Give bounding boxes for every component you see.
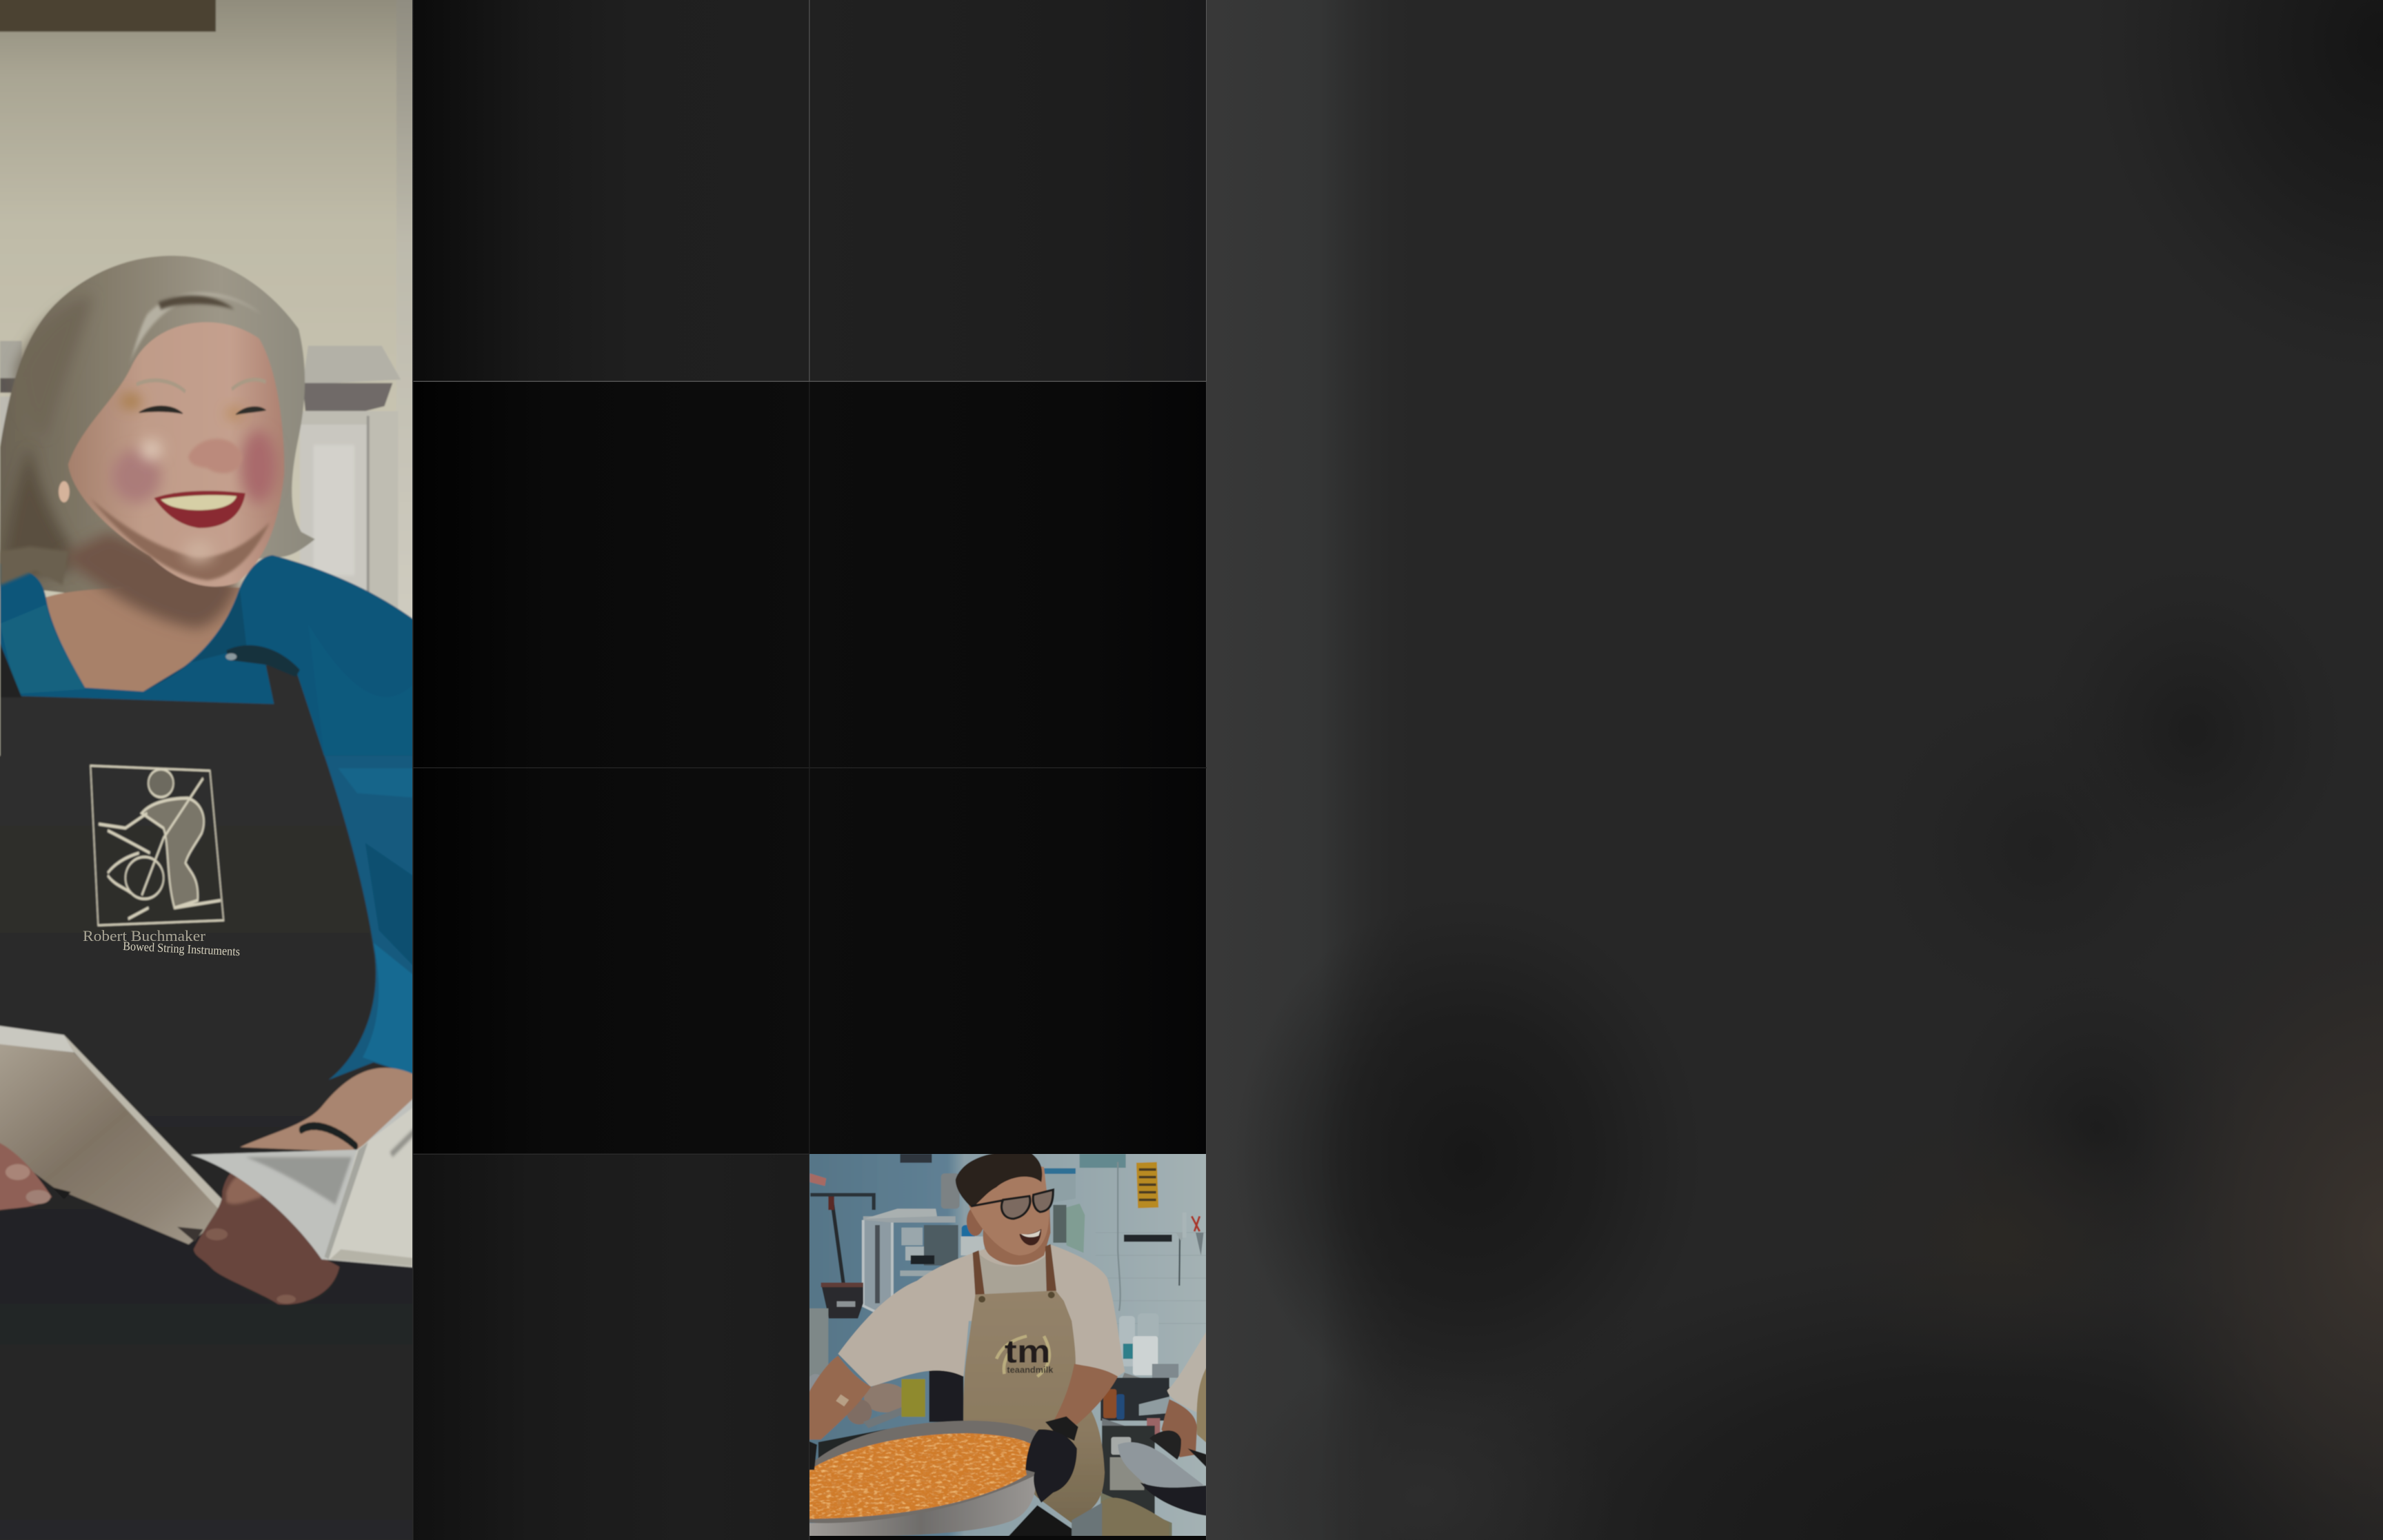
apron (963, 1290, 1105, 1523)
cell: bottom right backing (810, 1154, 1207, 1540)
kitchen rack (863, 1216, 958, 1313)
cart rail (1006, 1506, 1087, 1539)
hair (0, 256, 315, 595)
apron buttons (978, 1296, 985, 1303)
rice cooker (941, 1173, 960, 1208)
dark blur: upper right corner (1207, 0, 2383, 1540)
wall tile lines (1096, 1233, 1206, 1324)
cell: second row right (810, 381, 1207, 767)
trash bin (805, 1308, 828, 1379)
apron logo (996, 1335, 1054, 1377)
cell: third row right (810, 767, 1207, 1154)
kitchen wall (800, 1144, 1222, 1540)
apron straps (973, 1250, 985, 1296)
dark blur: lower left blob (1207, 0, 2383, 1540)
counter items (1119, 1313, 1178, 1394)
dark blur: middle spot (1207, 0, 2383, 1540)
apron strap: left (0, 643, 22, 698)
cell: top right (810, 0, 1207, 381)
brows (137, 381, 185, 392)
floor (1100, 1498, 1169, 1539)
door trim (397, 58, 412, 618)
smartwatch (1045, 1417, 1078, 1441)
right hand knuckle light (226, 1175, 262, 1204)
mouth (154, 491, 245, 528)
ear (59, 481, 70, 503)
wall sign right (1080, 1154, 1126, 1168)
dark blur: bottom band (1207, 0, 2383, 1540)
dark blur: right centre spot (1207, 0, 2383, 1540)
cheek: right (241, 430, 276, 503)
cell: third row left (412, 767, 810, 1154)
logo figure: cello (142, 778, 203, 895)
eye shadows (121, 394, 141, 408)
open mouth (1019, 1229, 1041, 1246)
right hand nails (206, 1228, 228, 1240)
light left edge (1207, 0, 1414, 1540)
bandage (836, 1395, 849, 1406)
apron bib top (0, 665, 325, 758)
cook: neck and head (956, 1152, 1053, 1265)
glasses (972, 1190, 1053, 1219)
panel: right blurred photo (1207, 0, 2383, 1540)
bowl (805, 1421, 1041, 1537)
neck (46, 590, 239, 691)
towels (865, 1208, 937, 1219)
wall tools (1176, 1213, 1204, 1286)
upper body and face layer (0, 256, 420, 758)
safety poster (1136, 1162, 1158, 1208)
neck shadow (60, 532, 240, 629)
cook: forearm right (1053, 1364, 1118, 1424)
left hand (0, 1139, 52, 1211)
noodles (805, 1433, 1032, 1519)
logo wordmark: teaandmilk (1007, 1365, 1054, 1375)
right hand (194, 1165, 339, 1304)
conduit (1118, 1162, 1120, 1311)
meat trays (805, 1369, 963, 1428)
glove: left (805, 1439, 817, 1470)
cheek: left (112, 449, 161, 503)
wall sign (810, 1173, 826, 1186)
glove: right (1025, 1429, 1077, 1503)
magnetic knife strip (1124, 1235, 1172, 1242)
shirt collar shade (978, 1253, 1056, 1296)
under-counter shelves (1100, 1378, 1172, 1539)
logo frame (90, 766, 223, 925)
second person: shirt (1167, 1324, 1211, 1412)
hair strands over shirt (0, 547, 68, 585)
apron and lower body layer (0, 756, 420, 1540)
photo contents (0, 0, 412, 1379)
warm blur: lower right (1207, 0, 2383, 1540)
cell: second row left (412, 381, 810, 767)
shirt (0, 555, 420, 758)
warm blur: lower centre (1207, 0, 2383, 1540)
logo leaves (996, 1336, 1049, 1377)
cheek highlight (141, 439, 162, 460)
photo contents (800, 1144, 1222, 1540)
collar fold shadow (226, 645, 300, 677)
mop handle and bucket (810, 1195, 874, 1319)
logo figure: legs (108, 853, 221, 919)
nose (188, 439, 243, 474)
light blur: bottom left (1207, 0, 2383, 1540)
wall moulding (0, 341, 401, 619)
blue bin and boards (1041, 1170, 1076, 1202)
cell: top left (412, 0, 810, 381)
jaw shading (90, 498, 270, 580)
photo: laughing cook holding bowl of noodles (800, 1144, 1222, 1540)
cell: bottom left (412, 1154, 810, 1540)
photo: smiling woman with apron holding sheet music (0, 0, 421, 1540)
face (68, 322, 284, 587)
logo figure: body (142, 798, 204, 908)
eye: right (236, 407, 266, 414)
eye: left (139, 406, 183, 414)
hair (956, 1152, 1042, 1208)
stove (818, 1424, 921, 1462)
apron logo (90, 766, 223, 925)
second person: apron (1197, 1359, 1211, 1447)
logo letters: tm (1005, 1335, 1051, 1370)
second person: glove and package (1118, 1430, 1211, 1517)
sleeve (325, 756, 420, 1080)
cook: t-shirt (838, 1244, 1125, 1386)
lower background (0, 756, 420, 1540)
wall (0, 0, 421, 765)
panel: grid of dark cells (412, 0, 1207, 1540)
apron text: maker name: Robert Buchmaker (83, 927, 206, 944)
left book (0, 1025, 232, 1244)
shelf bottle (962, 1225, 975, 1253)
logo figure: arm and bow (99, 813, 150, 853)
cook: arm left (805, 1356, 871, 1439)
chin highlight (184, 540, 214, 562)
collar button (225, 654, 237, 660)
second person: arm (1161, 1399, 1197, 1457)
picture frame (0, 0, 216, 32)
bracelet (301, 1126, 356, 1146)
right book (191, 1093, 420, 1268)
apron text: tagline: Bowed String Instruments (123, 939, 241, 958)
photo base at bottom edge (0, 1540, 412, 1541)
wrist (240, 1068, 420, 1152)
dark blur: lower middle spot (1207, 0, 2383, 1540)
logo figure: head (148, 769, 173, 797)
